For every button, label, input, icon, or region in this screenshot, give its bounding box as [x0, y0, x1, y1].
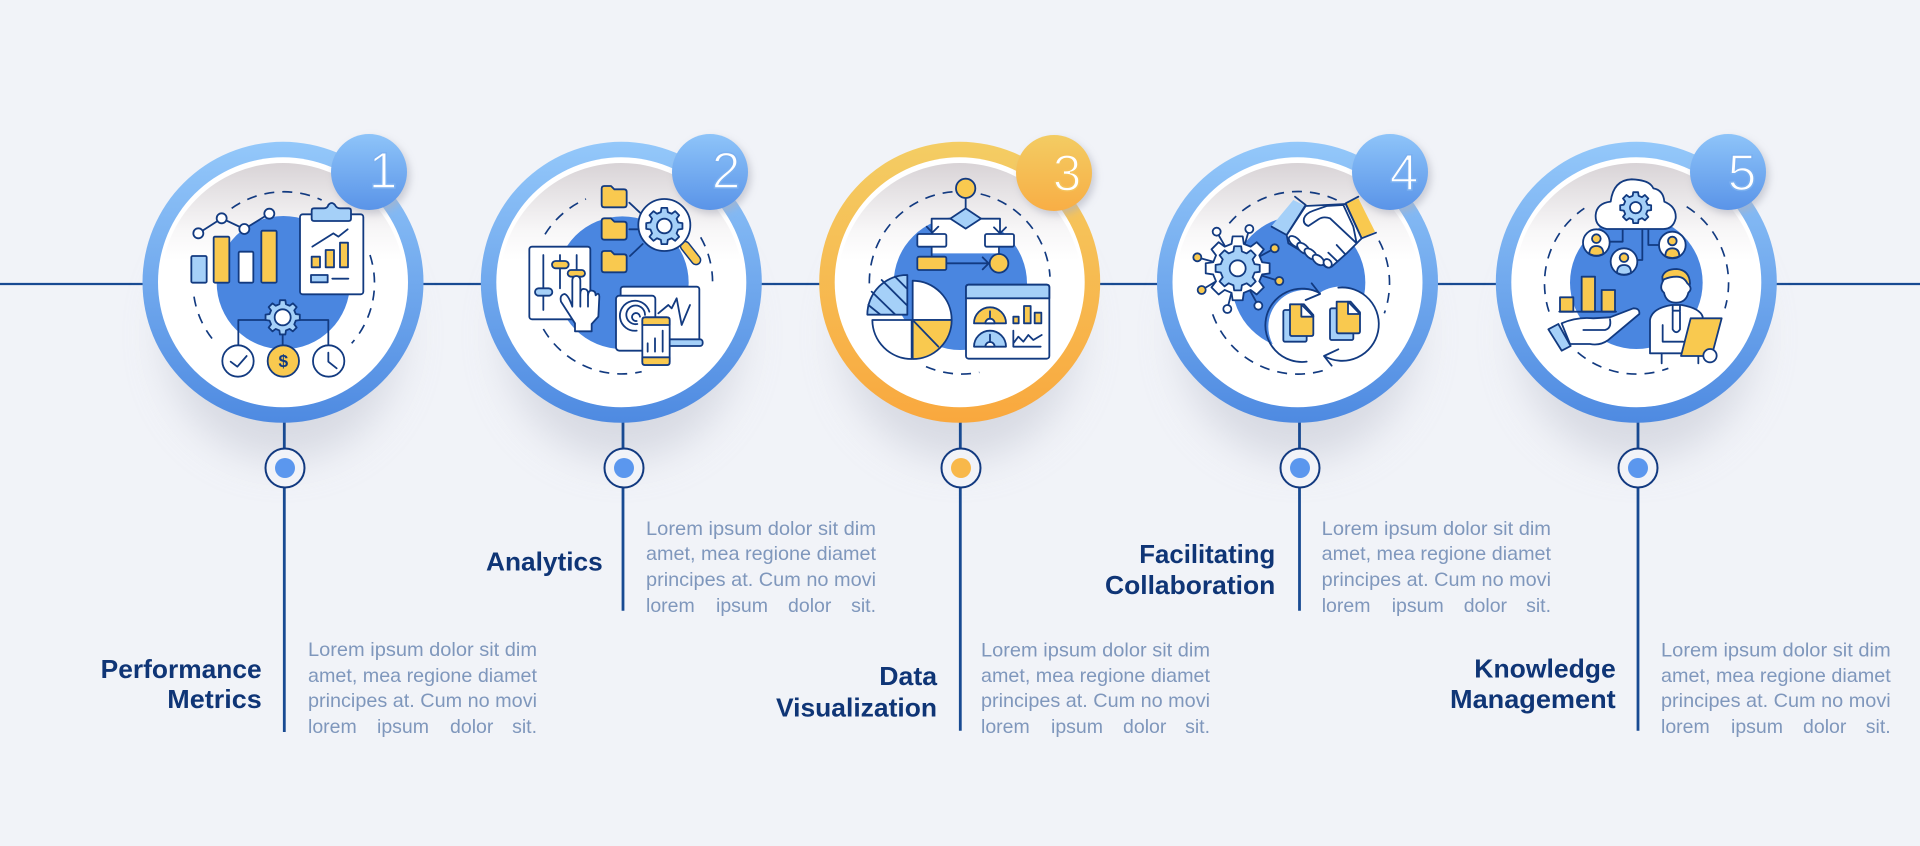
- heading: Knowledge Management: Knowledge: [1474, 654, 1616, 684]
- text block 5: lorem: [1661, 716, 1710, 738]
- text block 4: Lorem ipsum dolor sit dim: [1322, 518, 1551, 540]
- text block 5: sit.: [1866, 716, 1891, 738]
- text block 2: amet, mea regione diamet: [646, 543, 877, 565]
- icon: knowledge management: [1544, 179, 1729, 374]
- heading: Data Visualization: [776, 661, 938, 723]
- badge 4: 4: [1390, 144, 1418, 201]
- text block 5: amet, mea regione diamet: [1661, 665, 1891, 687]
- heading: Analytics: Analytics: [486, 547, 603, 577]
- ring 2: [481, 142, 762, 423]
- text block 2: [646, 518, 877, 617]
- text block 5: dolor: [1803, 716, 1847, 738]
- heading: Facilitating Collaboration: Collaboration: [1105, 570, 1275, 600]
- heading: Knowledge Management: Management: [1450, 684, 1616, 714]
- text block 5: principes at. Cum no movi: [1661, 690, 1891, 712]
- text block 2: sit.: [851, 595, 876, 617]
- ring 1: [142, 142, 424, 423]
- heading: Data Visualization: Visualization: [776, 693, 937, 723]
- panel: step 5 Knowledge Management: [1450, 134, 1891, 738]
- node marker 4: [1280, 448, 1320, 488]
- text block 1: [308, 639, 538, 738]
- badge 1: [331, 134, 410, 214]
- text block 1: amet, mea regione diamet: [308, 665, 538, 687]
- badge 5: 5: [1728, 144, 1756, 201]
- text block 4: lorem: [1322, 595, 1370, 617]
- text block 1: ipsum: [377, 716, 429, 738]
- panel: step 4 Facilitating Collaboration: [1105, 134, 1552, 617]
- text block 5: Lorem ipsum dolor sit dim: [1661, 640, 1891, 662]
- text block 1: principes at. Cum no movi: [308, 690, 537, 712]
- horizontal timeline: [0, 283, 1920, 285]
- text block 3: dolor: [1123, 716, 1167, 738]
- panel: step 1 Performance Metrics: [101, 134, 538, 738]
- text block 2: lorem: [646, 595, 695, 617]
- text block 1: Lorem ipsum dolor sit dim: [308, 639, 537, 661]
- node marker 3: [942, 448, 980, 488]
- text block 3: lorem: [981, 716, 1030, 738]
- text block 3: ipsum: [1051, 716, 1103, 738]
- badge 5: [1690, 134, 1769, 214]
- text block 2: ipsum: [716, 595, 768, 617]
- text block 5: ipsum: [1731, 716, 1783, 738]
- heading: Performance Metrics: Performance: [101, 654, 262, 684]
- icon: performance metrics: $: [279, 351, 289, 371]
- heading: Performance Metrics: Metrics: [167, 684, 262, 714]
- badge 3: 3: [1053, 144, 1081, 202]
- text block 4: [1322, 518, 1552, 617]
- text block 3: [981, 640, 1211, 738]
- text block 4: principes at. Cum no movi: [1322, 569, 1551, 591]
- panel: step 2 Analytics: [481, 134, 877, 617]
- badge 2: [672, 134, 751, 214]
- icon: data visualization: [867, 179, 1050, 374]
- text block 3: principes at. Cum no movi: [981, 690, 1210, 712]
- heading: Facilitating Collaboration: [1105, 539, 1275, 600]
- text block 1: sit.: [512, 716, 537, 738]
- badge 3: [1016, 135, 1095, 215]
- badge 4: [1352, 134, 1431, 214]
- text block 4: sit.: [1526, 595, 1551, 617]
- text block 4: ipsum: [1392, 595, 1444, 617]
- ring 3: [819, 142, 1100, 423]
- icon: analytics: [529, 186, 713, 374]
- text block 1: lorem: [308, 716, 357, 738]
- text block 1: dolor: [450, 716, 494, 738]
- heading: Knowledge Management: [1450, 654, 1616, 714]
- badge 1: 1: [369, 142, 397, 199]
- ring 5: [1496, 142, 1777, 423]
- icon: collaboration: [1193, 191, 1390, 374]
- text block 4: amet, mea regione diamet: [1322, 543, 1552, 565]
- node marker 5: [1618, 448, 1658, 488]
- text block 3: amet, mea regione diamet: [981, 665, 1211, 687]
- text block 5: [1661, 640, 1891, 738]
- text block 2: principes at. Cum no movi: [646, 569, 876, 591]
- panel: step 3 Data Visualization: [776, 135, 1211, 738]
- heading: Performance Metrics: [101, 654, 262, 714]
- text block 2: Lorem ipsum dolor sit dim: [646, 518, 876, 540]
- ring 4: [1157, 142, 1438, 423]
- heading: Data Visualization: Data: [879, 661, 938, 691]
- text block 2: dolor: [788, 595, 832, 617]
- text block 3: Lorem ipsum dolor sit dim: [981, 640, 1210, 662]
- text block 3: sit.: [1185, 716, 1210, 738]
- node marker 1: [266, 448, 304, 488]
- heading: Facilitating Collaboration: Facilitating: [1139, 539, 1275, 569]
- badge 2: 2: [712, 142, 740, 199]
- text block 4: dolor: [1464, 595, 1508, 617]
- node marker 2: [604, 448, 644, 488]
- icon: performance metrics: [191, 192, 374, 377]
